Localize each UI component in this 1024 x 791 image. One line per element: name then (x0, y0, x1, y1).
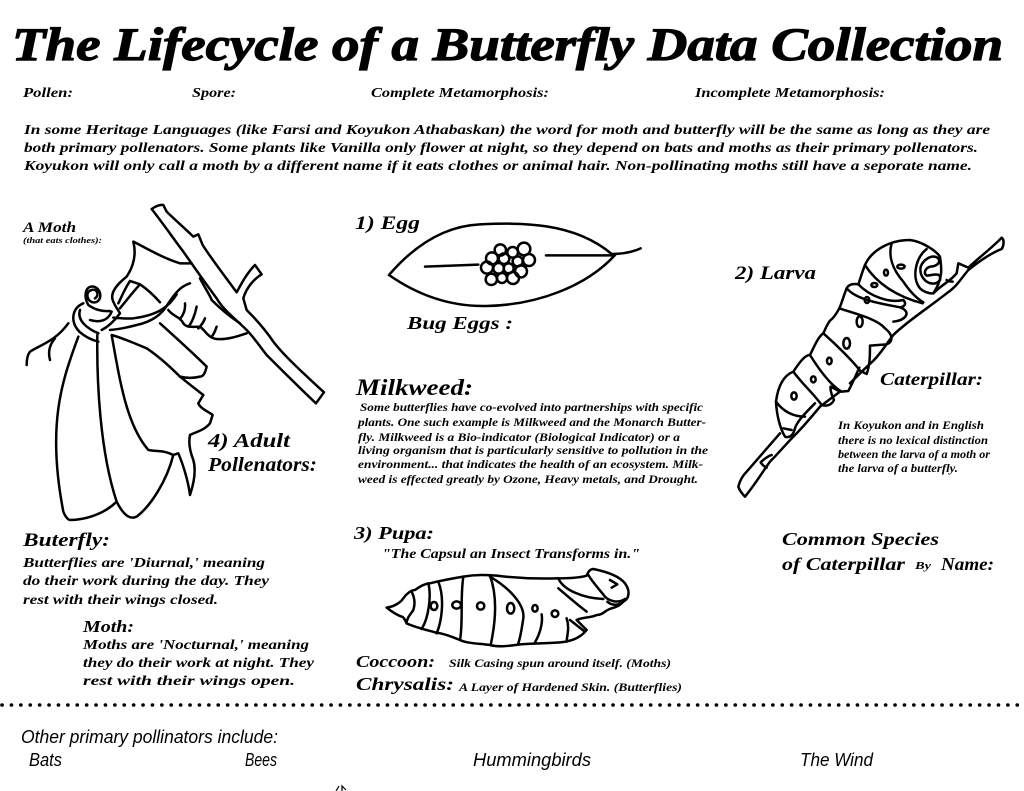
antennae and head (27, 286, 112, 365)
vocabulary terms row: Spore: (192, 85, 236, 100)
moth text block: rest with their wings open. (83, 674, 295, 689)
other pollinators section: Bats (29, 750, 62, 770)
caterpillar description: the larva of a butterfly. (838, 463, 958, 475)
coccoon definition: Coccoon: (356, 652, 435, 671)
forewings (56, 335, 213, 520)
wing case and head (558, 575, 625, 631)
moth text block: Moths are 'Nocturnal,' meaning (82, 638, 309, 653)
pupa heading: "The Capsul an Insect Transforms in." (382, 547, 640, 562)
coccoon definition (356, 652, 671, 671)
upper wing (102, 242, 192, 330)
common species heading: of Caterpillar (782, 554, 906, 574)
icon: caterpillar on a twig (738, 238, 1004, 497)
common species heading (782, 529, 994, 574)
moth label: A Moth (22, 220, 76, 236)
larva heading: 2) Larva (734, 263, 817, 284)
common species heading: By (914, 560, 931, 572)
caterpillar description: In Koyukon and in English (837, 420, 984, 432)
leaf outline (389, 224, 641, 306)
butterfly text block (22, 530, 270, 608)
milkweed text block (357, 402, 708, 486)
chrysalis definition (356, 674, 682, 694)
milkweed text block: plants. One such example is Milkweed and the Monarch Butter- (357, 417, 706, 429)
outline (387, 569, 629, 646)
milkweed heading: Milkweed: (355, 375, 473, 400)
milkweed text block: living organism that is particularly sensitive to pollution in the (358, 445, 708, 457)
butterfly text block: Buterfly: (22, 530, 110, 551)
milkweed text block: weed is effected greatly by Ozone, Heavy metals, and Drought. (358, 474, 698, 486)
chrysalis definition: Chrysalis: (356, 674, 454, 694)
vocabulary terms row: Complete Metamorphosis: (371, 85, 549, 100)
caterpillar description: there is no lexical distinction (838, 435, 988, 447)
body segments (776, 265, 923, 430)
icon: leaf with eggs (389, 224, 641, 306)
egg cluster (495, 244, 506, 256)
intro text block (23, 123, 990, 174)
pupa heading (353, 523, 640, 562)
head (890, 243, 940, 302)
icon: pupa (387, 569, 629, 646)
common species heading: Common Species (782, 529, 939, 549)
adult pollenators heading (207, 430, 317, 476)
milkweed text block: Some butterflies have co-evolved into partnerships with specific (360, 402, 703, 414)
intro text block: Koyukon will only call a moth by a different name if it eats clothes or animal hair. Non-pollinating moths still have a seporate name. (23, 159, 972, 174)
vocabulary terms row: Pollen: (23, 85, 73, 100)
egg heading: 1) Egg (355, 213, 420, 234)
midrib (425, 255, 612, 267)
caterpillar description: between the larva of a moth or (838, 449, 991, 461)
intro text block: both primary pollenators. Some plants like Vanilla only flower at night, so they depend on bats and moths as their primary pollenators. (24, 141, 978, 156)
vocabulary terms row (23, 85, 885, 100)
moth text block: Moth: (82, 617, 134, 636)
butterfly text block: Butterflies are 'Diurnal,' meaning (22, 556, 265, 571)
moth text block: they do their work at night. They (83, 656, 315, 671)
title: The Lifecycle of a Butterfly Data Collection (12, 19, 1003, 71)
caterpillar description (837, 420, 991, 475)
branch (152, 205, 324, 403)
spiracles (431, 602, 437, 610)
scalloped hindwing (110, 278, 247, 339)
body outline (776, 240, 941, 437)
butterfly text block: rest with their wings closed. (23, 593, 218, 608)
other pollinators section: Hummingbirds (473, 750, 591, 770)
chrysalis definition: A Layer of Hardened Skin. (Butterflies) (458, 682, 682, 694)
moth label: (that eats clothes): (23, 235, 102, 245)
butterfly text block: do their work during the day. They (23, 574, 270, 589)
other pollinators section (21, 727, 874, 770)
other pollinators section: Other primary pollinators include: (21, 727, 278, 747)
spiracles (897, 265, 905, 269)
intro text block: In some Heritage Languages (like Farsi and Koyukon Athabaskan) the word for moth and butterfly will be the same as long as they are (23, 123, 990, 138)
caterpillar heading: Caterpillar: (880, 369, 983, 389)
milkweed text block: fly. Milkweed is a Bio-indicator (Biological Indicator) or a (358, 432, 680, 444)
milkweed text block: environment... that indicates the health of an ecosystem. Milk- (358, 459, 703, 471)
segments (407, 576, 568, 645)
icon: moth on a branch (27, 205, 324, 520)
vocabulary terms row: Incomplete Metamorphosis: (694, 85, 885, 100)
pupa heading: 3) Pupa: (353, 523, 434, 544)
common species heading: Name: (940, 554, 994, 574)
coccoon definition: Silk Casing spun around itself. (Moths) (449, 658, 671, 670)
bug eggs label: Bug Eggs : (406, 313, 513, 333)
moth label (22, 220, 102, 245)
adult pollenators heading: 4) Adult (207, 430, 292, 452)
moth text block (82, 617, 315, 689)
other pollinators section: The Wind (800, 750, 874, 770)
adult pollenators heading: Pollenators: (207, 454, 317, 476)
other pollinators section: Bees (245, 750, 277, 770)
twig (738, 238, 1004, 497)
